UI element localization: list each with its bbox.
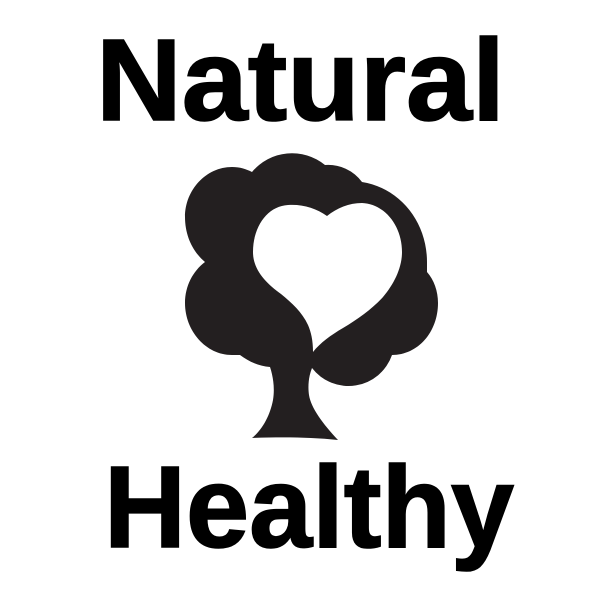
title: Healthy: Healthy <box>104 442 514 572</box>
title: Natural: Natural <box>96 15 505 145</box>
icon: tree with heart <box>185 153 438 440</box>
